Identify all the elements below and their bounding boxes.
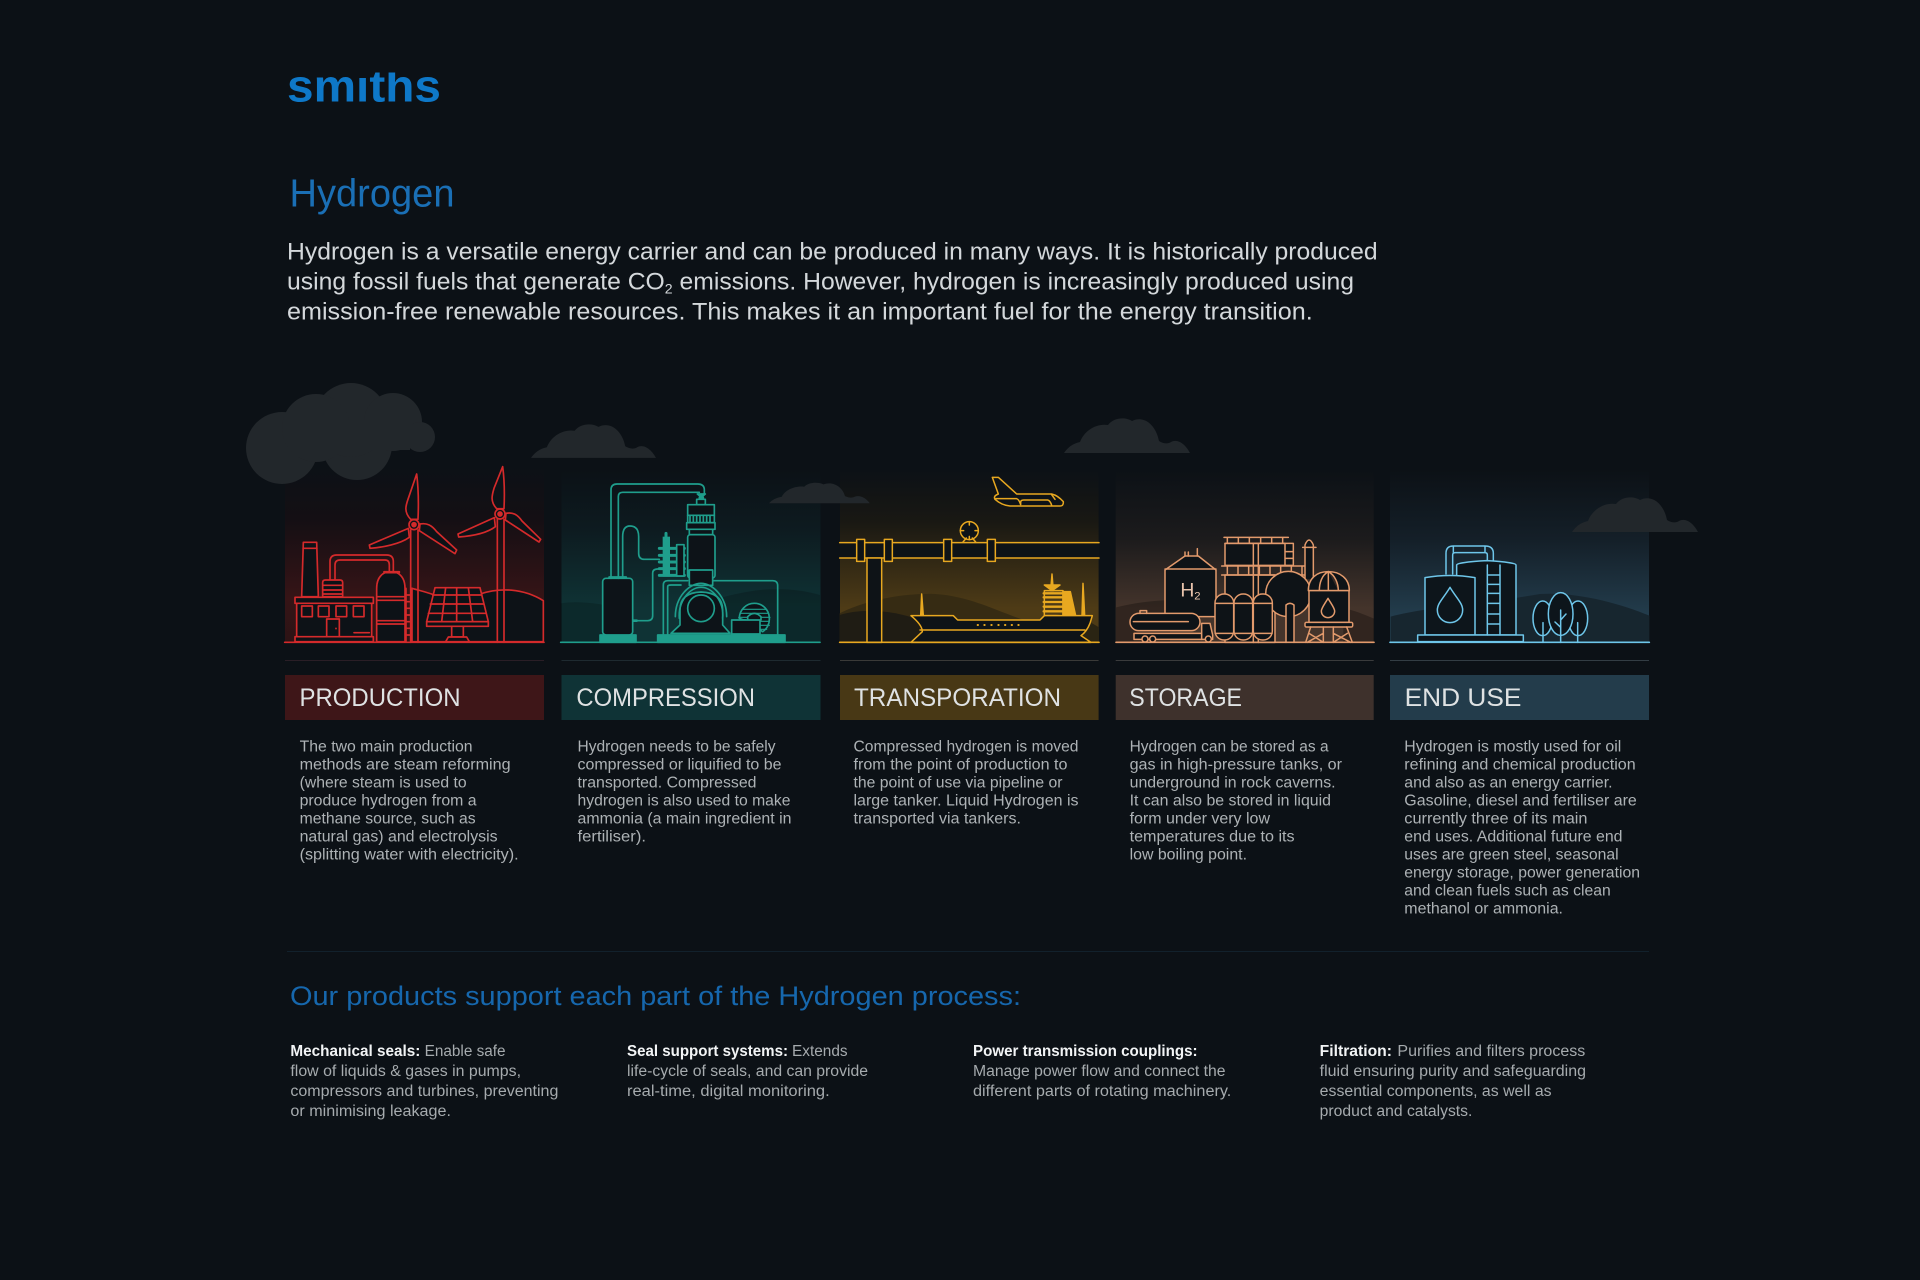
product: filtration: essential components, as well as — [1320, 1083, 1552, 1100]
text: end use: uses are green steel, seasonal — [1404, 847, 1619, 864]
text: production — [300, 739, 519, 864]
product: mechanical seals: Mechanical seals: — [290, 1043, 420, 1060]
text: end use: energy storage, power generation — [1404, 865, 1640, 882]
panel: production scene — [285, 466, 544, 643]
label: storage — [1116, 675, 1374, 720]
product: seal support systems: life-cycle of seals, and can provide — [627, 1063, 868, 1080]
divider — [285, 660, 544, 661]
text: end use: refining and chemical production — [1404, 757, 1636, 774]
label: end use: END USE — [1405, 684, 1521, 712]
text: end use: end uses. Additional future end — [1404, 829, 1622, 846]
label: compression: COMPRESSION — [576, 684, 755, 712]
cloud: third — [769, 483, 870, 503]
product: filtration: fluid ensuring purity and safeguarding — [1320, 1063, 1586, 1080]
text: storage: low boiling point. — [1130, 847, 1247, 864]
text: production: methods are steam reforming — [300, 757, 511, 774]
illustration: oil tanks and trees — [1390, 546, 1649, 642]
panel: storage scene — [1116, 470, 1374, 643]
label: end use — [1390, 675, 1649, 720]
divider — [840, 660, 1099, 661]
intro paragraph: Hydrogen is a versatile energy carrier and can be produced in many ways. It is historically produced — [287, 238, 1378, 266]
text: transportation — [854, 739, 1079, 828]
divider — [1390, 660, 1649, 661]
text: transportation: large tanker. Liquid Hydrogen is — [854, 793, 1079, 810]
product: mechanical seals: Enable safe — [425, 1043, 506, 1060]
text: end use — [1404, 739, 1640, 918]
product: power transmission couplings: Manage power flow and connect the — [973, 1063, 1226, 1080]
panel: transportation scene — [840, 470, 1099, 643]
text: compression: Hydrogen needs to be safely — [578, 739, 776, 756]
product: power transmission couplings — [973, 1043, 1231, 1100]
illustration: pipeline, plane and ship — [840, 477, 1099, 642]
label: compression — [562, 675, 820, 720]
text: end use: currently three of its main — [1404, 811, 1588, 828]
title: Hydrogen — [290, 173, 454, 216]
text: production: methane source, such as — [300, 811, 476, 828]
text: end use: methanol or ammonia. — [1404, 901, 1563, 918]
product: mechanical seals: compressors and turbines, preventing — [290, 1083, 558, 1100]
cloud: fourth — [1064, 418, 1190, 453]
text: storage: underground in rock caverns. — [1130, 775, 1336, 792]
heading: products: Our products support each part of the Hydrogen process: — [290, 981, 1021, 1011]
cloud: fifth — [1572, 497, 1698, 532]
text: production: (splitting water with electricity). — [300, 847, 519, 864]
text: storage — [1130, 739, 1342, 864]
cloud: large storm cloud — [246, 383, 435, 484]
illustration: factory, wind turbines and solar panel — [285, 467, 544, 642]
text: production: produce hydrogen from a — [300, 793, 477, 810]
product: filtration: Filtration: — [1320, 1043, 1392, 1060]
text: compression: ammonia (a main ingredient in — [578, 811, 792, 828]
product: seal support systems: Extends — [792, 1043, 848, 1060]
label: production: PRODUCTION — [300, 684, 460, 712]
label: storage: STORAGE — [1129, 684, 1242, 712]
text: end use: Hydrogen is mostly used for oil — [1404, 739, 1621, 756]
text: end use: and also as an energy carrier. — [1404, 775, 1612, 792]
text: compression — [578, 739, 792, 846]
cloud: second — [531, 424, 656, 458]
intro paragraph: emission-free renewable resources. This makes it an important fuel for the energy transition. — [287, 298, 1313, 326]
product: filtration — [1320, 1043, 1586, 1120]
text: end use: and clean fuels such as clean — [1404, 883, 1611, 900]
panel: compression scene — [561, 470, 820, 643]
product: power transmission couplings: Power transmission couplings: — [973, 1043, 1198, 1060]
intro paragraph: using fossil fuels that generate CO — [287, 268, 662, 296]
illustration: storage tanks — [1116, 537, 1374, 642]
text: transportation: the point of use via pipeline or — [854, 775, 1062, 792]
text: storage: Hydrogen can be stored as a — [1130, 739, 1329, 756]
product: mechanical seals: or minimising leakage. — [290, 1103, 451, 1120]
text: production: (where steam is used to — [300, 775, 467, 792]
text: end use: Gasoline, diesel and fertiliser are — [1404, 793, 1637, 810]
text: transportation: transported via tankers. — [854, 811, 1021, 828]
text: compression: compressed or liquified to be — [578, 757, 782, 774]
text: compression: hydrogen is also used to make — [578, 793, 790, 810]
product: seal support systems: real-time, digital monitoring. — [627, 1083, 830, 1100]
intro paragraph: emissions. However, hydrogen is increasingly produced using — [673, 268, 1354, 296]
divider — [562, 660, 820, 661]
product: power transmission couplings: different parts of rotating machinery. — [973, 1083, 1231, 1100]
text: transportation: Compressed hydrogen is moved — [854, 739, 1078, 756]
product: mechanical seals: flow of liquids & gases in pumps, — [290, 1063, 521, 1080]
product: seal support systems — [627, 1043, 868, 1100]
text: storage: temperatures due to its — [1130, 829, 1295, 846]
text: compression: fertiliser). — [578, 829, 646, 846]
text: storage: It can also be stored in liquid — [1130, 793, 1331, 810]
text: storage: gas in high-pressure tanks, or — [1130, 757, 1342, 774]
text: production: The two main production — [300, 739, 473, 756]
illustration: compressor — [561, 484, 820, 642]
divider — [1116, 660, 1374, 661]
product: filtration: Purifies and filters process — [1397, 1043, 1586, 1060]
text: production: natural gas) and electrolysis — [300, 829, 498, 846]
intro paragraph: 2 — [665, 280, 673, 296]
panel: end use scene — [1390, 470, 1649, 643]
text: storage: form under very low — [1130, 811, 1271, 828]
logo: smiths: smiths — [287, 61, 441, 112]
text: transportation: from the point of production to — [854, 757, 1068, 774]
label: transportation: TRANSPORATION — [854, 684, 1061, 712]
intro paragraph — [287, 238, 1378, 326]
product: seal support systems: Seal support systems: — [627, 1043, 788, 1060]
text: compression: transported. Compressed — [578, 775, 756, 792]
section divider — [287, 951, 1649, 952]
product: mechanical seals — [290, 1043, 558, 1120]
label: transportation — [840, 675, 1099, 720]
product: filtration: product and catalysts. — [1320, 1103, 1472, 1120]
label: production — [285, 675, 544, 720]
label: H2: H — [1180, 581, 1194, 602]
label: H2: 2 — [1194, 591, 1201, 603]
